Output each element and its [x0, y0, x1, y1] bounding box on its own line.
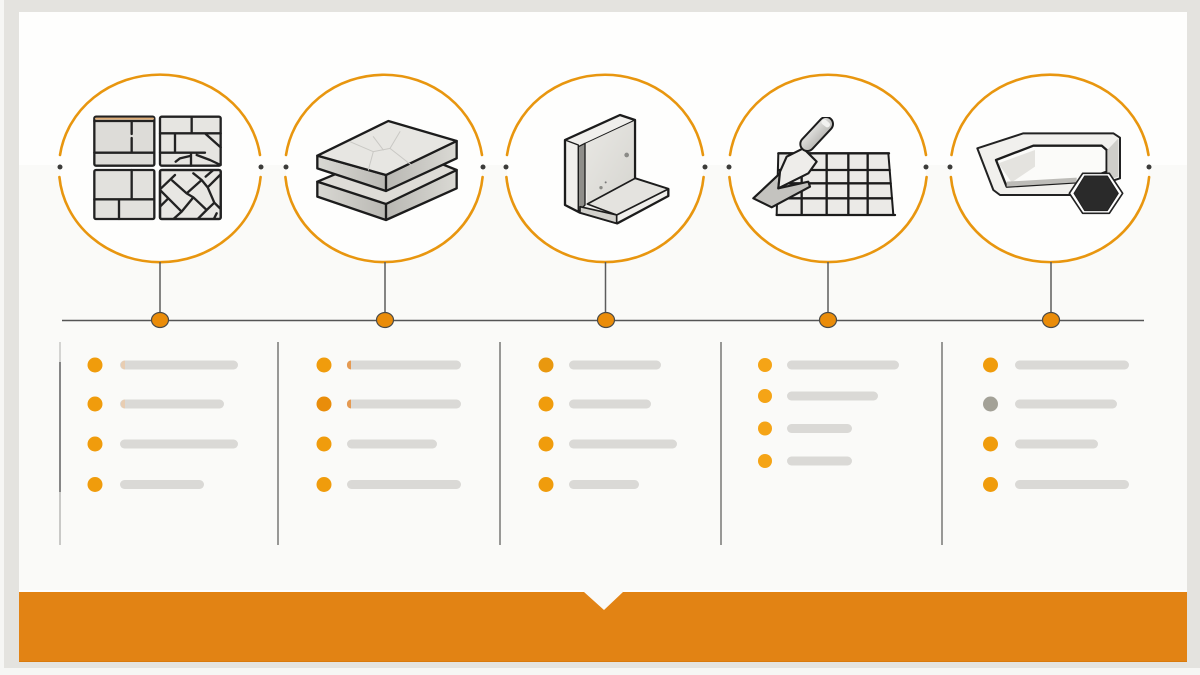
bottom banner with notch [19, 591, 1187, 662]
list column 3 [538, 358, 677, 492]
circle 2: stacked slabs [284, 75, 486, 262]
circle 1: tile layouts [58, 75, 264, 262]
list column 5 [983, 358, 1129, 492]
icon: dark hexagon [1069, 173, 1123, 213]
list column 4 [758, 358, 899, 468]
timeline axis [62, 262, 1144, 328]
list column 1 [88, 358, 238, 492]
column dividers [60, 342, 942, 545]
circle 5: frame and hexagon [948, 75, 1152, 262]
icon: trowel on tile grid [753, 122, 895, 215]
icon: L-shaped stone profile [565, 115, 668, 223]
circle 4: trowel and tile grid [726, 75, 928, 262]
icon: stone frame with hexagon [977, 133, 1123, 213]
list column 2 [316, 358, 461, 492]
icon: stacked stone slabs [317, 121, 457, 220]
circle 3: L-shaped stone [504, 75, 708, 262]
icon: tile pattern grid [94, 117, 222, 220]
